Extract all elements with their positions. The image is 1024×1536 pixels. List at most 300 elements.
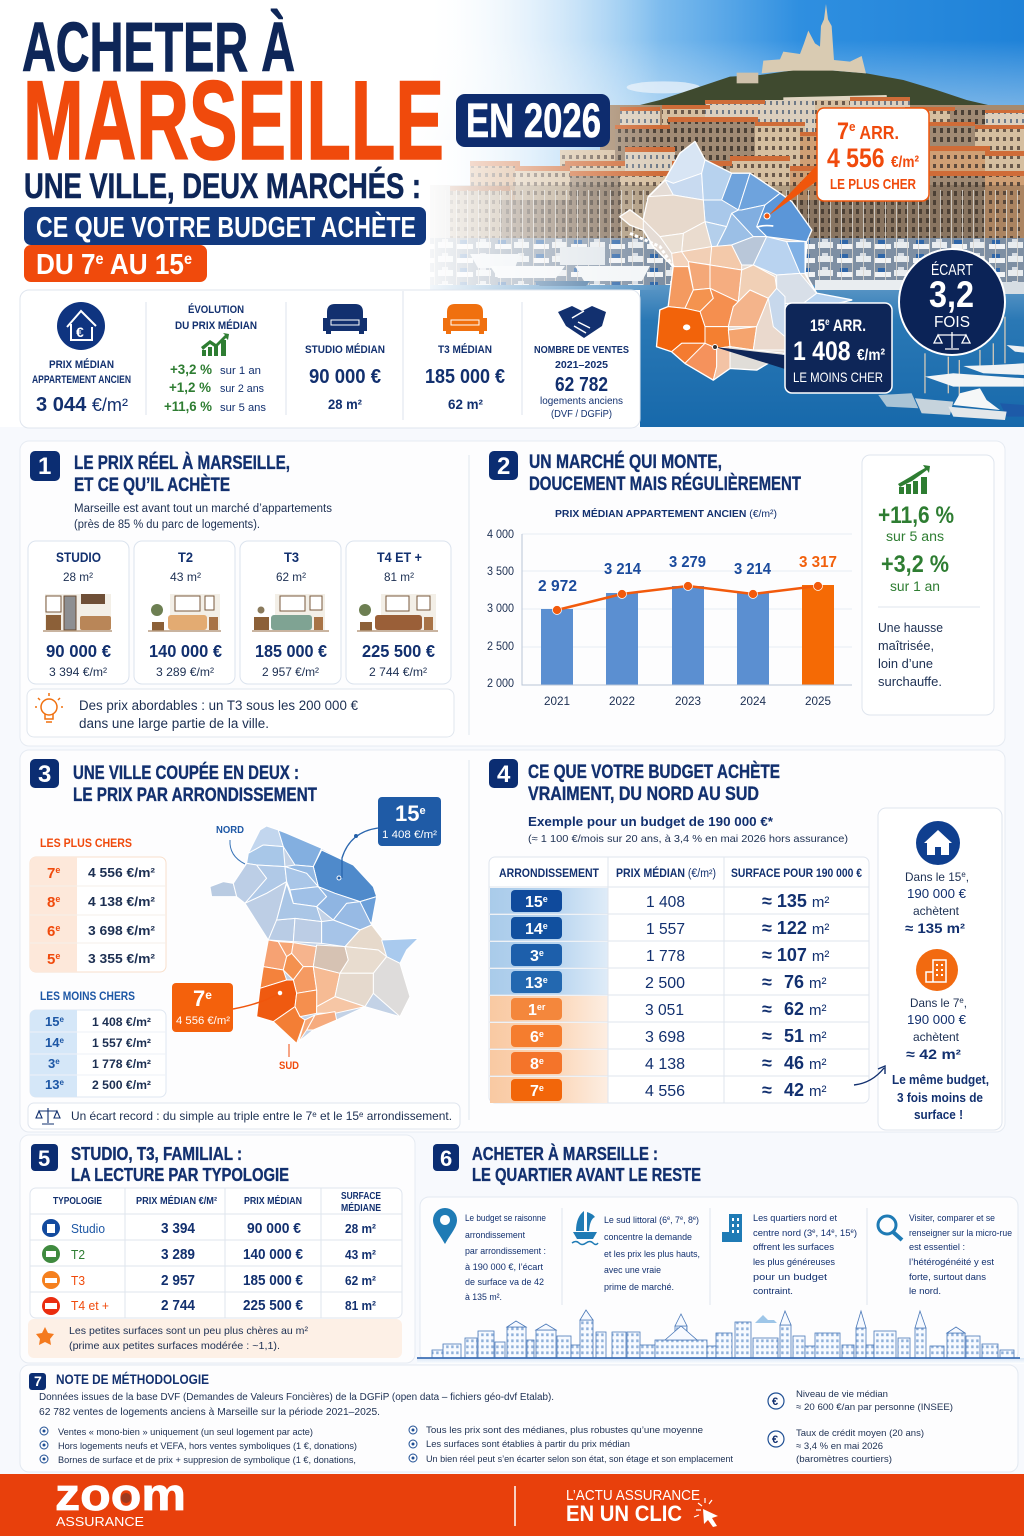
number badge 6: 6 bbox=[440, 1146, 452, 1171]
heading 4: VRAIMENT, DU NORD AU SUD bbox=[528, 784, 759, 805]
chart: median price by year: 2 972 bbox=[538, 578, 577, 595]
table: most expensive bbox=[30, 836, 166, 972]
key figure: price change: DU PRIX MÉDIAN bbox=[175, 319, 257, 332]
side card: growth: +3,2 % bbox=[881, 551, 949, 578]
table: surface by arrondissement: 6 bbox=[530, 1029, 539, 1046]
section 5: by type bbox=[28, 1144, 402, 1358]
advice: budget by arrondissement: arrondissement bbox=[465, 1230, 525, 1241]
footer bbox=[0, 1469, 1024, 1536]
heading 6: LE QUARTIER AVANT LE RESTE bbox=[472, 1165, 701, 1185]
key figure: price change: sur 1 an bbox=[220, 365, 261, 377]
tip callout: dans une large partie de la ville. bbox=[79, 716, 269, 731]
side card: comparison: Dans le 15 bbox=[905, 870, 962, 884]
table: surface by arrondissement bbox=[489, 857, 869, 1103]
table: surface by arrondissement: 14 bbox=[525, 921, 543, 938]
key figure: median price: 3 044 €/m² bbox=[36, 394, 128, 416]
section 1: real price bbox=[27, 451, 454, 737]
card: T4 and more: 2 744 €/m² bbox=[369, 665, 427, 679]
context: credit rate bbox=[768, 1428, 924, 1465]
card: studio: 90 000 € bbox=[46, 641, 111, 661]
key figure: price change: +1,2 % bbox=[169, 380, 211, 395]
note: small surfaces: (prime aux petites surfaces modérée : ~1,1). bbox=[69, 1340, 280, 1352]
heading 2: UN MARCHÉ QUI MONTE, bbox=[529, 451, 722, 473]
title: ACHETER À bbox=[22, 8, 295, 86]
methodology bullets left bbox=[40, 1427, 357, 1466]
number badge 6 bbox=[433, 1144, 459, 1171]
advice: southern coast: prime de marché. bbox=[604, 1282, 674, 1293]
table: cheapest: 1 557 €/m² bbox=[92, 1036, 151, 1050]
context: living standard: ≈ 20 600 €/an par personne (INSEE) bbox=[796, 1402, 953, 1413]
key figure: price change: ÉVOLUTION bbox=[188, 303, 244, 316]
intro text: (près de 85 % du parc de logements). bbox=[74, 519, 260, 531]
callout: 7e most expensive: ARR. bbox=[856, 123, 899, 143]
table: by typology: T2 bbox=[71, 1247, 85, 1262]
side card: growth: maîtrisée, bbox=[878, 639, 934, 653]
budget example bbox=[528, 814, 848, 845]
city buildings bbox=[430, 97, 1024, 295]
context: credit rate: ≈ 3,4 % en mai 2026 bbox=[796, 1441, 883, 1452]
illustration: T4 room bbox=[357, 594, 438, 631]
advice: southern coast: e bbox=[680, 1216, 684, 1222]
key figure: T3: 62 m² bbox=[448, 396, 483, 412]
table: cheapest bbox=[30, 989, 166, 1097]
callout: 15e on map: e bbox=[419, 805, 426, 817]
intro text: Marseille est avant tout un marché d’appartements bbox=[74, 503, 332, 515]
methodology bullets middle: Les surfaces sont établies à partir du prix médian bbox=[426, 1439, 630, 1450]
advice: southern coast: e bbox=[693, 1216, 697, 1222]
side card: comparison: achètent bbox=[913, 904, 960, 918]
side card: growth bbox=[862, 455, 994, 715]
icon: click cursor bbox=[694, 1498, 718, 1527]
table: surface by arrondissement: e bbox=[543, 975, 548, 985]
advice: northern districts: centre nord (3 bbox=[753, 1228, 812, 1239]
title: UNE VILLE, DEUX MARCHÉS : bbox=[24, 166, 421, 206]
advice: visit and compare: est essentiel : bbox=[909, 1242, 965, 1253]
key figure: number of sales: (DVF / DGFiP) bbox=[551, 408, 612, 420]
callout: 7e on map: e bbox=[205, 988, 212, 1002]
moored boats bottom right bbox=[878, 317, 1024, 420]
card: T2 bbox=[134, 541, 235, 684]
note: record gap: e bbox=[312, 1110, 317, 1119]
chart: median price by year: 2023 bbox=[675, 694, 701, 708]
advice: visit and compare bbox=[878, 1213, 1012, 1297]
table: cheapest: 3 bbox=[48, 1056, 55, 1071]
label: north: NORD bbox=[216, 824, 244, 836]
table: cheapest: e bbox=[59, 1036, 64, 1045]
card: T3: 185 000 € bbox=[255, 641, 327, 661]
table: most expensive: 5 bbox=[47, 951, 55, 968]
table: surface by arrondissement: 13 bbox=[525, 975, 543, 992]
context: credit rate: Taux de crédit moyen (20 ans) bbox=[796, 1428, 924, 1439]
heading 3: LE PRIX PAR ARRONDISSEMENT bbox=[73, 785, 317, 806]
side card: comparison: ≈ 135 m² bbox=[905, 920, 965, 936]
methodology bullets middle: Un bien réel peut s’en écarter selon son état, son étage et son emplacement bbox=[426, 1454, 733, 1465]
callout: 15e cheapest: LE MOINS CHER bbox=[793, 369, 883, 385]
note: record gap: e bbox=[359, 1110, 364, 1119]
table: cheapest: 14 bbox=[45, 1035, 59, 1050]
table: surface by arrondissement: e bbox=[539, 1029, 544, 1039]
tip callout bbox=[27, 689, 454, 737]
callout: 15e cheapest: 15 bbox=[810, 316, 829, 335]
methodology intro: Données issues de la base DVF (Demandes de Valeurs Foncières) de la DGFiP (open data – fichiers géo-dvf Etalab). bbox=[39, 1392, 554, 1403]
table: by typology: 3 394 bbox=[161, 1220, 196, 1237]
card: T3: T3 bbox=[284, 549, 299, 565]
advice: northern districts: pour un budget bbox=[753, 1272, 827, 1283]
table: cheapest: 15 bbox=[45, 1014, 59, 1029]
table: most expensive: e bbox=[55, 951, 60, 961]
advice: southern coast: , 8 bbox=[683, 1215, 693, 1226]
heading 5 bbox=[71, 1144, 289, 1185]
table: surface by arrondissement: 2 500 bbox=[645, 975, 685, 992]
side card: comparison: surface ! bbox=[914, 1108, 963, 1122]
context: credit rate: (baromètres courtiers) bbox=[796, 1454, 892, 1465]
table: surface by arrondissement: e bbox=[543, 921, 548, 931]
note: record gap: et le 15 bbox=[317, 1109, 359, 1123]
hero map of Marseille bbox=[620, 142, 852, 380]
table: surface by arrondissement: 76 m² bbox=[784, 972, 827, 992]
callout: 7e most expensive: e bbox=[849, 119, 856, 134]
table: by typology: 43 m² bbox=[345, 1247, 377, 1262]
number badge 7: 7 bbox=[34, 1373, 42, 1389]
number badge 3 bbox=[30, 759, 59, 788]
key figure: studio: STUDIO MÉDIAN bbox=[305, 343, 385, 356]
card: T4 and more: 81 m² bbox=[384, 570, 414, 584]
advice: southern coast: et les prix les plus hauts, bbox=[604, 1249, 700, 1260]
heading 4 bbox=[528, 761, 780, 805]
methodology intro: 62 782 ventes de logements anciens à Marseille sur la période 2021–2025. bbox=[39, 1407, 380, 1418]
callout: 7e most expensive: 4 556 €/m² bbox=[827, 143, 919, 173]
callout: 15e on map: 15 bbox=[395, 801, 419, 826]
chart: median price by year: 3 000 bbox=[487, 603, 514, 615]
advice: budget by arrondissement: Le budget se raisonne bbox=[465, 1213, 546, 1224]
callout: 7e on map bbox=[172, 983, 278, 1032]
table: by typology: 2 957 bbox=[161, 1272, 195, 1289]
side card: growth: Une hausse bbox=[878, 621, 943, 635]
table: surface by arrondissement: 51 m² bbox=[784, 1026, 827, 1046]
key figure: price change: sur 2 ans bbox=[220, 383, 264, 395]
subtitle bar: du 7e au 15e: e bbox=[184, 251, 192, 268]
key figure: number of sales bbox=[534, 306, 629, 420]
label: south bbox=[279, 1044, 299, 1072]
chart: median price by year bbox=[487, 529, 852, 708]
number badge 1: 1 bbox=[38, 453, 51, 480]
advice: visit and compare: Visiter, comparer et se bbox=[909, 1213, 995, 1224]
table: surface by arrondissement: 1 557 bbox=[646, 921, 685, 938]
key figure: price change: +3,2 % bbox=[170, 362, 212, 377]
table: surface by arrondissement: 4 556 bbox=[645, 1083, 685, 1100]
subtitle bar: budget: CE QUE VOTRE BUDGET ACHÈTE bbox=[36, 210, 416, 244]
number badge 2: 2 bbox=[497, 453, 510, 480]
callout: 15e cheapest: 1 408 €/m² bbox=[793, 336, 885, 366]
heading 4: CE QUE VOTRE BUDGET ACHÈTE bbox=[528, 761, 780, 783]
heading 6: ACHETER À MARSEILLE : bbox=[472, 1143, 658, 1164]
table: surface by arrondissement: 42 m² bbox=[784, 1080, 827, 1100]
map: price by arrondissement bbox=[210, 826, 418, 1043]
advice: northern districts: , 14 bbox=[815, 1228, 831, 1239]
side card: comparison: , bbox=[966, 870, 969, 884]
table: cheapest: e bbox=[55, 1057, 60, 1066]
table: cheapest: 2 500 €/m² bbox=[92, 1078, 151, 1092]
chart: median price by year: 2025 bbox=[805, 694, 831, 708]
advice: northern districts: e bbox=[831, 1229, 835, 1235]
section 3: divided city bbox=[28, 759, 460, 1129]
advice: southern coast: e bbox=[667, 1216, 671, 1222]
side card: comparison: ≈ 42 m² bbox=[906, 1046, 961, 1062]
number badge 7 bbox=[29, 1373, 46, 1390]
table: surface by arrondissement: ≈ 135 m² bbox=[762, 891, 829, 911]
number badge 5 bbox=[31, 1144, 58, 1171]
card: T3 bbox=[240, 541, 341, 684]
table: most expensive: 7 bbox=[47, 865, 55, 882]
side card: growth: sur 5 ans bbox=[886, 529, 944, 544]
badge: en 2026: EN 2026 bbox=[466, 95, 601, 148]
chart: median price by year: 2 500 bbox=[487, 641, 514, 653]
card: studio: STUDIO bbox=[56, 549, 101, 565]
callout: 7e on map: 4 556 €/m² bbox=[176, 1015, 230, 1027]
card: T3: 2 957 €/m² bbox=[262, 665, 319, 679]
intro text bbox=[74, 503, 332, 531]
side card: comparison: 3 fois moins de bbox=[897, 1091, 983, 1105]
side card: comparison: achètent bbox=[913, 1030, 960, 1044]
table: surface by arrondissement: e bbox=[539, 1083, 544, 1093]
note: small surfaces bbox=[28, 1319, 402, 1358]
chart: median price by year: 2021 bbox=[544, 694, 570, 708]
table: surface by arrondissement: 46 m² bbox=[784, 1053, 827, 1073]
slogan: L’ACTU ASSURANCE bbox=[566, 1487, 700, 1504]
callout: 7e on map: 7 bbox=[193, 986, 205, 1011]
heading 1 bbox=[74, 452, 290, 496]
table: by typology: TYPOLOGIE bbox=[53, 1196, 102, 1207]
table: most expensive: LES PLUS CHERS bbox=[40, 836, 132, 850]
table: surface by arrondissement: 62 m² bbox=[784, 999, 827, 1019]
methodology bullets middle bbox=[409, 1425, 733, 1465]
table: by typology: PRIX MÉDIAN bbox=[244, 1194, 302, 1207]
key figure: number of sales: 62 782 bbox=[555, 374, 608, 396]
table: surface by arrondissement: e bbox=[543, 894, 548, 904]
side card: comparison: 190 000 € bbox=[907, 1013, 966, 1027]
title: MARSEILLE bbox=[23, 58, 444, 183]
gap badge: 3,2 times: ÉCART bbox=[931, 260, 973, 279]
key figure: median price: APPARTEMENT ANCIEN bbox=[32, 374, 131, 386]
table: cheapest: 13 bbox=[45, 1077, 59, 1092]
budget example: (≈ 1 100 €/mois sur 20 ans, à 3,4 % en mai 2026 hors assurance) bbox=[528, 833, 848, 845]
chart: median price by year: 2024 bbox=[740, 694, 766, 708]
logo: zoom assurance: zoom bbox=[55, 1469, 186, 1520]
advice: northern districts: e bbox=[850, 1229, 854, 1235]
table: most expensive: 3 355 €/m² bbox=[88, 951, 156, 966]
advice: visit and compare: renseigner sur la micro-rue bbox=[909, 1228, 1012, 1239]
advice: budget by arrondissement: par arrondissement : bbox=[465, 1246, 546, 1257]
card: T2: T2 bbox=[178, 549, 193, 565]
advice: southern coast: Le sud littoral (6 bbox=[604, 1215, 672, 1226]
note: small surfaces: Les petites surfaces sont un peu plus chères au m² bbox=[69, 1325, 308, 1337]
number badge 4 bbox=[489, 759, 518, 788]
card: T3: 62 m² bbox=[276, 570, 306, 584]
heading 3 bbox=[73, 762, 317, 806]
gap badge: 3,2 times: 3,2 bbox=[929, 274, 974, 315]
heading 5: STUDIO, T3, FAMILIAL : bbox=[71, 1144, 242, 1164]
table: surface by arrondissement: 1 408 bbox=[646, 894, 685, 911]
note: record gap bbox=[28, 1103, 460, 1129]
gap badge: 3,2 times: FOIS bbox=[934, 314, 970, 331]
card: studio: 3 394 €/m² bbox=[49, 665, 107, 679]
table: most expensive: 6 bbox=[47, 923, 55, 940]
table: cheapest: LES MOINS CHERS bbox=[40, 989, 135, 1003]
key figure: price change: +11,6 % bbox=[164, 399, 212, 414]
table: surface by arrondissement: PRIX MÉDIAN (€/m²) bbox=[616, 867, 716, 880]
number badge 1 bbox=[30, 451, 60, 481]
key figure: number of sales: logements anciens bbox=[540, 395, 623, 407]
table: most expensive: 3 698 €/m² bbox=[88, 923, 156, 938]
chart: median price by year: 2 000 bbox=[487, 678, 514, 690]
advice: budget by arrondissement: à 135 m². bbox=[465, 1292, 502, 1303]
table: surface by arrondissement: ≈ bbox=[762, 999, 772, 1019]
table: surface by arrondissement: e bbox=[539, 1056, 544, 1066]
marina and masts bbox=[430, 190, 1024, 427]
table: by typology: 90 000 € bbox=[247, 1220, 302, 1237]
chart: median price by year: 3 317 bbox=[799, 554, 837, 571]
panel: advice bbox=[417, 1197, 1024, 1364]
heading 5: LA LECTURE PAR TYPOLOGIE bbox=[71, 1165, 289, 1185]
table: cheapest: e bbox=[59, 1015, 64, 1024]
table: by typology: 2 744 bbox=[161, 1297, 196, 1314]
side card: growth: surchauffe. bbox=[878, 675, 942, 689]
number badge 2 bbox=[489, 451, 518, 480]
card: T2: 140 000 € bbox=[149, 641, 222, 661]
heading 2: DOUCEMENT MAIS RÉGULIÈREMENT bbox=[529, 473, 801, 495]
chart: median price by year: 3 500 bbox=[487, 566, 514, 578]
advice: northern districts: e bbox=[812, 1229, 816, 1235]
row icons bbox=[42, 1219, 60, 1315]
icon: growth chart bbox=[898, 465, 930, 494]
advice: northern districts: offrent les surfaces bbox=[753, 1242, 834, 1253]
hill with basilica bbox=[620, 4, 1024, 140]
heading 7: NOTE DE MÉTHODOLOGIE bbox=[56, 1371, 209, 1387]
callout: 7e most expensive bbox=[764, 108, 929, 219]
key figure: studio: 90 000 € bbox=[309, 366, 381, 388]
advice: budget by arrondissement: à 190 000 €, l’écart bbox=[465, 1262, 543, 1273]
subtitle bar: du 7e au 15e: e bbox=[96, 251, 104, 268]
icon: house bbox=[916, 821, 960, 865]
key figure: studio bbox=[305, 304, 385, 412]
section 4: budget table bbox=[489, 759, 1002, 1130]
table: by typology: Studio bbox=[71, 1221, 105, 1236]
illustration: city skyline bbox=[417, 1310, 1024, 1364]
table: cheapest: e bbox=[59, 1078, 64, 1087]
slogan bbox=[566, 1487, 700, 1526]
callout: 15e on map: 1 408 €/m² bbox=[382, 829, 437, 841]
chart: median price by year: 3 214 bbox=[604, 561, 641, 578]
advice: southern coast: avec une vraie bbox=[604, 1265, 661, 1276]
card: T4 and more bbox=[346, 541, 451, 684]
subtitle bar: du 7e au 15e: AU 15 bbox=[104, 249, 184, 281]
context: living standard: Niveau de vie médian bbox=[796, 1389, 888, 1400]
table: surface by arrondissement: er bbox=[537, 1002, 546, 1012]
card: studio: 28 m² bbox=[63, 570, 93, 584]
table: by typology: 62 m² bbox=[345, 1273, 377, 1288]
chart title: PRIX MÉDIAN APPARTEMENT ANCIEN (€/m²) bbox=[555, 507, 777, 520]
table: by typology: 140 000 € bbox=[243, 1246, 304, 1263]
heading 3: UNE VILLE COUPÉE EN DEUX : bbox=[73, 762, 299, 784]
table: most expensive: e bbox=[55, 894, 60, 904]
key figure: T3: T3 MÉDIAN bbox=[438, 343, 492, 356]
table: surface by arrondissement: 15 bbox=[525, 894, 543, 911]
table: surface by arrondissement: 1 778 bbox=[646, 948, 685, 965]
table: surface by arrondissement: 4 138 bbox=[645, 1056, 685, 1073]
advice: budget by arrondissement bbox=[433, 1208, 546, 1303]
note: record gap: arrondissement. bbox=[363, 1109, 452, 1123]
heading 1: LE PRIX RÉEL À MARSEILLE, bbox=[74, 452, 290, 474]
section 7: methodology note bbox=[20, 1365, 1018, 1472]
table: most expensive: 8 bbox=[47, 894, 55, 911]
table: by typology: 28 m² bbox=[345, 1221, 377, 1236]
callout: 15e cheapest: e bbox=[825, 317, 830, 328]
arrow to comparison card bbox=[854, 1066, 885, 1085]
advice: northern districts: , 15 bbox=[835, 1228, 850, 1239]
callout: 15e cheapest: ARR. bbox=[830, 316, 866, 335]
table: surface by arrondissement: 3 051 bbox=[645, 1002, 684, 1019]
key figure: T3: 185 000 € bbox=[425, 366, 505, 388]
side card: comparison: 190 000 € bbox=[907, 887, 966, 901]
methodology bullets left: Bornes de surface et de prix + suppresion de symbolique (1 €, donations, bbox=[58, 1455, 356, 1466]
key figure: price change bbox=[164, 303, 267, 414]
table: by typology: SURFACE bbox=[341, 1191, 381, 1202]
methodology intro bbox=[39, 1392, 554, 1418]
methodology bullets middle: Tous les prix sont des médianes, plus robustes qu’une moyenne bbox=[426, 1425, 703, 1436]
title bbox=[22, 8, 444, 206]
key figure: number of sales: NOMBRE DE VENTES bbox=[534, 344, 629, 356]
card: T2: 3 289 €/m² bbox=[156, 665, 214, 679]
number badge 4: 4 bbox=[497, 761, 511, 788]
subtitle bar: budget bbox=[24, 207, 426, 245]
number badge 3: 3 bbox=[38, 761, 51, 788]
callout: 15e on map bbox=[342, 797, 441, 878]
table: cheapest: 1 778 €/m² bbox=[92, 1057, 151, 1071]
table: by typology: MÉDIANE bbox=[341, 1201, 381, 1214]
side card: growth: loin d’une bbox=[878, 657, 933, 671]
table: surface by arrondissement: 3 698 bbox=[645, 1029, 685, 1046]
table: most expensive: 4 556 €/m² bbox=[88, 865, 156, 880]
table: surface by arrondissement: 1 bbox=[528, 1002, 537, 1019]
section 6: neighbourhood first bbox=[417, 1143, 1024, 1364]
table: by typology: T3 bbox=[71, 1273, 85, 1288]
key figure: T3 bbox=[425, 304, 505, 412]
card: T4 and more: T4 ET + bbox=[377, 549, 422, 565]
advice: northern districts: Les quartiers nord et bbox=[753, 1213, 837, 1224]
table: surface by arrondissement: 7 bbox=[530, 1083, 539, 1100]
key figure: median price bbox=[32, 302, 131, 416]
hero photo: Marseille harbour and Notre-Dame de la Garde bbox=[0, 0, 1024, 427]
chart: median price by year: 4 000 bbox=[487, 529, 514, 541]
table: most expensive: 4 138 €/m² bbox=[88, 894, 156, 909]
table: surface by arrondissement: ARRONDISSEMENT bbox=[499, 868, 599, 880]
key figure: price change: sur 5 ans bbox=[220, 402, 267, 414]
chart: median price by year: 2022 bbox=[609, 694, 635, 708]
side card: growth: sur 1 an bbox=[890, 579, 940, 594]
context: living standard: € bbox=[772, 1396, 778, 1408]
subtitle bar: du 7e au 15e bbox=[24, 245, 207, 282]
side card: comparison: Dans le 7 bbox=[910, 996, 961, 1010]
logo: zoom assurance: ASSURANCE bbox=[56, 1514, 144, 1529]
tip callout: Des prix abordables : un T3 sous les 200 000 € bbox=[79, 698, 358, 713]
heading 2 bbox=[529, 451, 801, 495]
methodology bullets left: Ventes « mono-bien » uniquement (un seul logement par acte) bbox=[58, 1427, 313, 1438]
table: most expensive: e bbox=[55, 865, 60, 875]
table: surface by arrondissement: ≈ bbox=[762, 1053, 772, 1073]
table: by typology bbox=[30, 1188, 402, 1318]
budget example: Exemple pour un budget de 190 000 €* bbox=[528, 814, 774, 829]
table: surface by arrondissement: ≈ bbox=[762, 1026, 772, 1046]
